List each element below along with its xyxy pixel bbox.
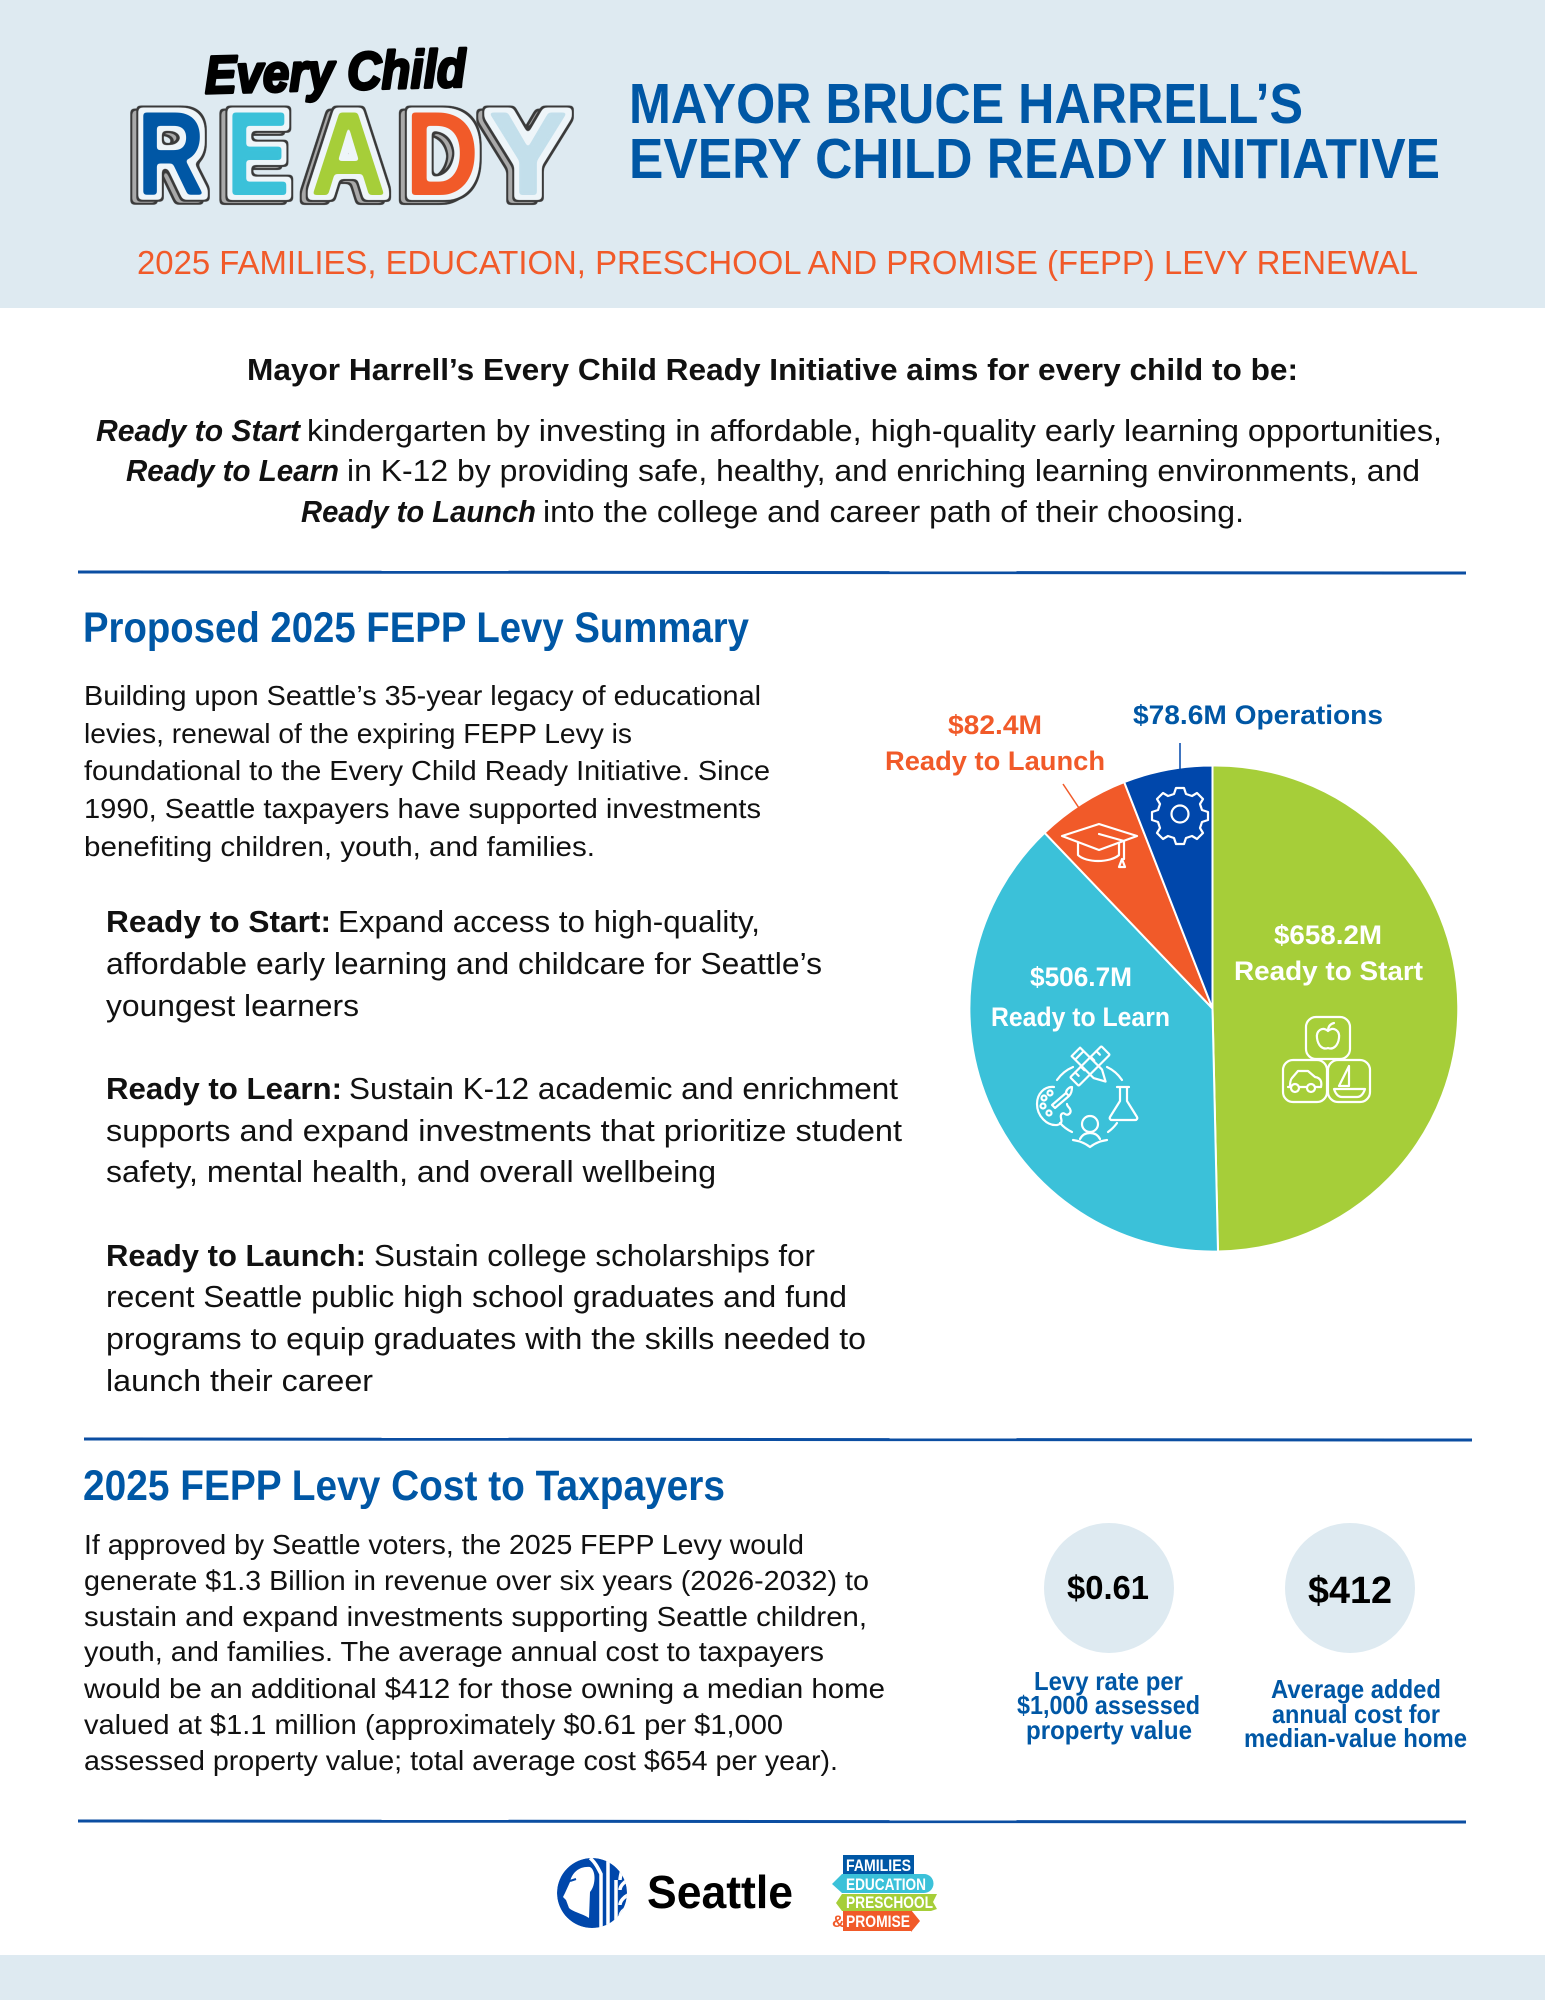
logo: City of Seattle: [557, 1858, 793, 1930]
person: [1082, 1116, 1098, 1132]
text block: cost to taxpayers: generate $1.3 Billion in revenue over six years (2026-2032) to: [84, 1565, 869, 1596]
text block: cost to taxpayers: would be an additional $412 for those owning a median home: [83, 1673, 885, 1704]
caption: levy rate: Levy rate per: [1034, 1666, 1183, 1696]
bar: preschool: [836, 1894, 937, 1911]
slice: ready to launch: [1045, 782, 1212, 1008]
text block: cost to taxpayers: youth, and families. The average annual cost to taxpayers: [84, 1636, 824, 1667]
panel: header band: [0, 0, 1545, 308]
slice: ready to start: [1212, 765, 1458, 1252]
text block: levy summary: foundational to the Every Child Ready Initiative. Since: [84, 755, 770, 786]
title: [629, 72, 1440, 191]
text block: ready to start: [106, 904, 822, 1023]
text block: levy summary: [84, 680, 770, 862]
intro paragraph: Ready to Launch: [301, 494, 536, 529]
title: EVERY CHILD READY INITIATIVE: [629, 127, 1440, 191]
text block: ready to launch: launch their career: [106, 1363, 373, 1398]
text block: levy summary: Building upon Seattle’s 35-year legacy of educational: [84, 680, 761, 711]
caption: levy rate: property value: [1026, 1715, 1192, 1745]
intro paragraph: into the college and career path of their choosing.: [543, 494, 1244, 529]
flask: [1110, 1087, 1137, 1120]
ruler and pencil: [1070, 1046, 1110, 1086]
icon: Seattle seal: [557, 1858, 628, 1930]
text block: levy summary: 1990, Seattle taxpayers have supported investments: [84, 793, 761, 824]
text block: levy summary: benefiting children, youth, and families.: [84, 831, 595, 862]
text block: cost to taxpayers: valued at $1.1 million (approximately $0.61 per $1,000: [84, 1709, 783, 1740]
subtitle: 2025 FAMILIES, EDUCATION, PRESCHOOL AND PROMISE (FEPP) LEVY RENEWAL: [137, 244, 1418, 281]
slice: operations: [1124, 766, 1212, 1008]
logo letter Y: Y: [487, 87, 569, 221]
logo: FEPP: FAMILIES: [846, 1856, 911, 1875]
icon: building blocks: [1283, 1017, 1370, 1102]
text block: ready to start: Ready to Start:: [106, 904, 331, 939]
slice: ready to learn: [969, 833, 1218, 1252]
bar: education: [832, 1874, 934, 1893]
number: added cost: $412: [1308, 1570, 1392, 1612]
text block: cost to taxpayers: assessed property value; total average cost $654 per year).: [84, 1745, 838, 1776]
text block: ready to start: youngest learners: [106, 988, 359, 1023]
text block: ready to learn: safety, mental health, and overall wellbeing: [106, 1154, 716, 1189]
caption: added cost: [1244, 1674, 1467, 1753]
icon: graduation cap: [1062, 824, 1137, 867]
intro paragraph: Ready to Learn: [126, 453, 339, 488]
circle: added cost: [1285, 1523, 1415, 1653]
text block: ready to learn: [106, 1071, 902, 1189]
label: ready to start: Ready to Start: [1234, 956, 1423, 986]
text block: ready to launch: Ready to Launch:: [106, 1238, 366, 1273]
stat: average added cost: [1244, 1523, 1467, 1753]
label: ready to launch: $82.4M: [948, 710, 1042, 740]
text block: levy summary: levies, renewal of the expiring FEPP Levy is: [84, 718, 632, 749]
text block: ready to launch: programs to equip graduates with the skills needed to: [106, 1321, 866, 1356]
number: levy rate: $0.61: [1067, 1569, 1149, 1606]
logo letter E: E: [226, 87, 290, 221]
text block: ready to learn: supports and expand investments that prioritize student: [106, 1113, 902, 1148]
wordmark: Seattle: Seattle: [647, 1866, 793, 1918]
logo: FEPP: PRESCHOOL: [846, 1893, 933, 1912]
text block: ready to learn: Ready to Learn:: [106, 1071, 342, 1106]
text block: cost to taxpayers: If approved by Seattle voters, the 2025 FEPP Levy would: [84, 1529, 804, 1560]
title: MAYOR BRUCE HARRELL’S: [629, 72, 1303, 136]
intro heading: Mayor Harrell’s Every Child Ready Initiative aims for every child to be:: [247, 352, 1298, 387]
label: ready to learn: $506.7M: [1030, 962, 1132, 992]
logo: FEPP: PROMISE: [846, 1912, 910, 1931]
circle: levy rate: [1044, 1523, 1174, 1653]
intro paragraph: Ready to Start: [96, 413, 302, 448]
label: ready to start: [1234, 920, 1423, 986]
text block: cost to taxpayers: [83, 1529, 885, 1776]
label: ready to launch: [885, 710, 1105, 776]
icon: learning circle: [1037, 1046, 1137, 1147]
caption: added cost: median-value home: [1244, 1723, 1467, 1753]
heading: levy summary: Proposed 2025 FEPP Levy Summary: [83, 604, 749, 652]
heading: cost to taxpayers: 2025 FEPP Levy Cost to Taxpayers: [83, 1462, 725, 1510]
caption: added cost: annual cost for: [1272, 1699, 1440, 1729]
intro paragraph: in K-12 by providing safe, healthy, and enriching learning environments, and: [347, 453, 1420, 488]
footer band: [0, 1955, 1545, 2000]
bar: families: [843, 1855, 914, 1874]
text block: ready to start: Expand access to high-quality,: [338, 904, 760, 939]
bar: promise: [843, 1910, 920, 1932]
pie chart: levy allocation: [885, 700, 1458, 1252]
logo letter R: R: [137, 87, 205, 221]
text block: ready to start: affordable early learning and childcare for Seattle’s: [106, 946, 822, 981]
leader: launch: [1063, 784, 1079, 808]
stat: levy rate: [1017, 1523, 1200, 1745]
intro paragraph: [96, 413, 1442, 529]
label: operations: $78.6M Operations: [1133, 700, 1383, 730]
text block: ready to launch: Sustain college scholarships for: [374, 1238, 815, 1273]
logo letter D: D: [405, 87, 479, 221]
label: ready to launch: Ready to Launch: [885, 746, 1105, 776]
logo: FEPP: &: [832, 1912, 844, 1931]
logo script: Every Child: Every Child: [204, 39, 468, 105]
text block: ready to learn: Sustain K-12 academic and enrichment: [349, 1071, 898, 1106]
text block: ready to launch: recent Seattle public high school graduates and fund: [106, 1279, 847, 1314]
caption: levy rate: $1,000 assessed: [1017, 1690, 1200, 1720]
intro paragraph: kindergarten by investing in affordable, high-quality early learning opportunities,: [307, 413, 1442, 448]
palette: [1037, 1087, 1071, 1125]
icon: gear: [1152, 788, 1208, 844]
logo letter A: A: [310, 87, 387, 221]
text block: ready to launch: [106, 1238, 866, 1398]
leader: operations: [1179, 743, 1181, 769]
label: ready to start: $658.2M: [1274, 920, 1382, 950]
label: ready to learn: [991, 962, 1170, 1032]
caption: levy rate: [1017, 1666, 1200, 1745]
logo: FEPP: [832, 1855, 937, 1932]
caption: added cost: Average added: [1271, 1674, 1441, 1704]
text block: cost to taxpayers: sustain and expand investments supporting Seattle children,: [84, 1601, 867, 1632]
logo: FEPP: EDUCATION: [846, 1875, 926, 1894]
label: ready to learn: Ready to Learn: [991, 1002, 1170, 1032]
logo: Every Child Ready: [137, 39, 569, 221]
